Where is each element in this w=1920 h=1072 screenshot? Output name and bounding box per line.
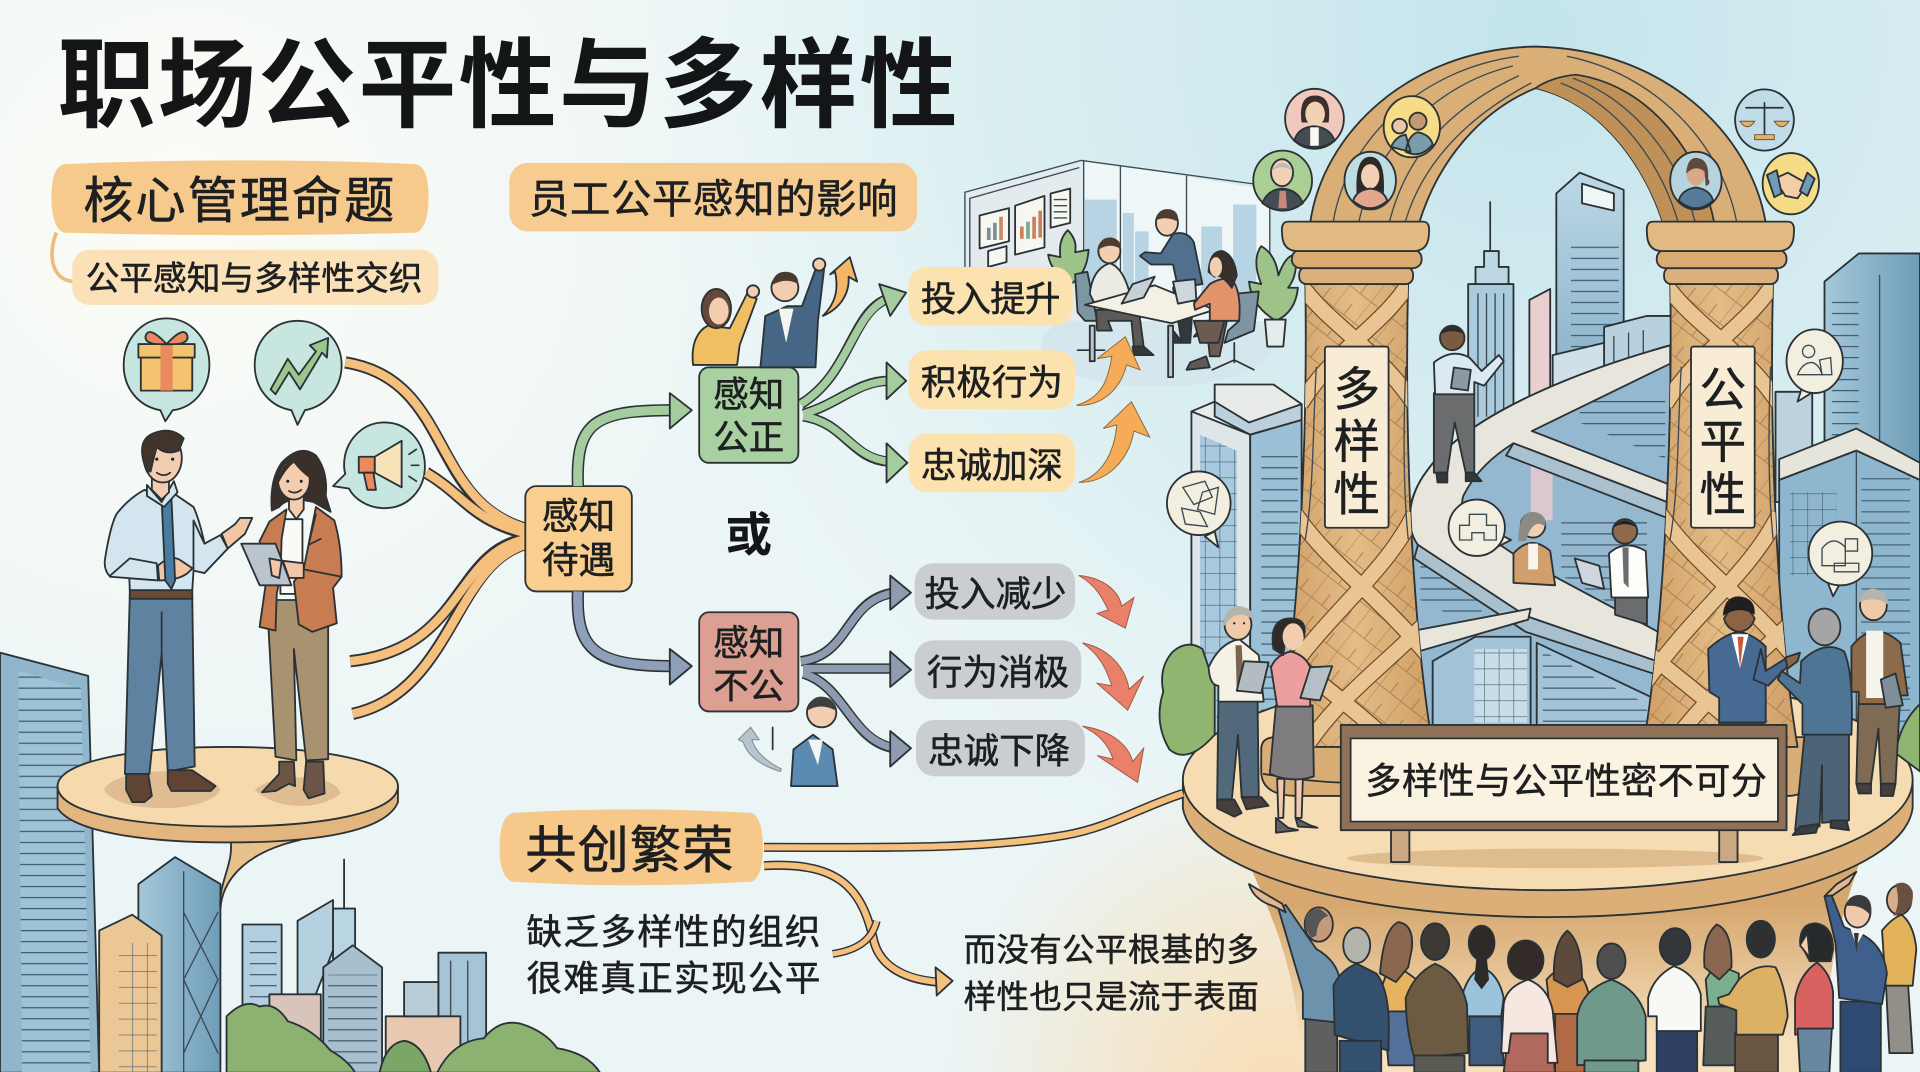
- central sign: 多样性与公平性密不可分: [1365, 760, 1767, 801]
- outcome: engagement up: 投入提升: [921, 279, 1060, 319]
- plaque: 公平性: 平: [1700, 416, 1746, 468]
- trees: left bottom: [227, 1004, 600, 1072]
- ribbons into perceived treatment: [345, 362, 529, 714]
- box: perceived treatment: [525, 486, 632, 591]
- icon bubble: megaphone: [333, 422, 425, 508]
- people: celebrating pair: [693, 257, 857, 367]
- pillar base rings: [1261, 737, 1820, 796]
- note: diversity without equity: [964, 932, 1259, 1015]
- arch: woven span: [1310, 47, 1766, 223]
- plaque: 公平性: 性: [1700, 469, 1746, 521]
- people on platform: right group: [1708, 589, 1908, 835]
- person: man in blue shirt: [105, 431, 252, 802]
- raised-arm man, left: [1249, 884, 1340, 1072]
- outcome: negative behaviour: 行为消极: [927, 652, 1069, 692]
- note: lack of diversity: 很难真正实现公平: [527, 959, 820, 999]
- outcome: positive behaviour: 积极行为: [921, 362, 1063, 402]
- subheading: fairness interwoven with diversity: 公平感知与多样性交织: [86, 260, 422, 298]
- heading: shared prosperity: [500, 809, 763, 885]
- plaque: 多样性: 性: [1333, 469, 1380, 521]
- orange rising arrows: [1076, 337, 1150, 482]
- box: perceived unfair: 不公: [713, 666, 784, 706]
- office plants: [1048, 230, 1298, 347]
- outcome: loyalty down: 忠诚下降: [928, 731, 1070, 771]
- box: perceived unfair: 感知: [713, 623, 784, 663]
- red falling arrows: [1079, 576, 1144, 782]
- connector: core to subtitle: [52, 233, 73, 282]
- skyline: left bottom city: [0, 653, 486, 1072]
- outcome: deeper loyalty: [909, 433, 1075, 492]
- heading: core proposition: 核心管理命题: [83, 173, 394, 229]
- office team around table: [1075, 209, 1259, 377]
- plaque: 公平性: [1691, 347, 1755, 528]
- skyline behind arch: [1191, 173, 1920, 759]
- heading: impact of employee perception: [509, 163, 917, 231]
- box: perceived treatment: 感知: [542, 496, 615, 537]
- people on bridge: woman and laptop man: [1513, 512, 1648, 624]
- sign shadow on platform: [1347, 849, 1763, 868]
- ribbons: prosperity to platform and note: [764, 793, 1183, 996]
- box: perceived treatment: 待遇: [542, 540, 615, 581]
- heading: impact of employee perception: 员工公平感知的影响: [529, 176, 898, 222]
- right platform and pedestal: [1183, 670, 1913, 1072]
- pillar: diversity: [1273, 222, 1439, 759]
- note: diversity without equity: 而没有公平根基的多: [964, 932, 1259, 968]
- pillar: equity: [1638, 222, 1804, 759]
- plaque: 多样性: 多: [1333, 363, 1380, 415]
- arrow: treatment to perceived fair: [578, 393, 692, 486]
- box: perceived fair: [699, 367, 798, 463]
- person: dejected employee: [738, 697, 838, 786]
- branch arrows: fair outcomes: [801, 284, 907, 482]
- outcome: deeper loyalty: 忠诚加深: [921, 446, 1063, 486]
- plaque: 多样性: 样: [1333, 416, 1380, 468]
- left platform: [58, 747, 398, 909]
- note: diversity without equity: 样性也只是流于表面: [964, 979, 1259, 1015]
- note: lack of diversity: 缺乏多样性的组织: [527, 912, 820, 952]
- subheading: fairness interwoven with diversity: [72, 250, 438, 305]
- plaque: 多样性: [1325, 347, 1389, 528]
- outcome: engagement up: [909, 267, 1073, 326]
- icon bubble: growth arrow: [255, 321, 342, 425]
- small speech bubbles in city: [1167, 329, 1872, 596]
- outcome: positive behaviour: [909, 350, 1075, 409]
- people on platform: left pair: [1209, 606, 1332, 833]
- outcome: negative behaviour: [915, 640, 1081, 699]
- title: 职场公平性与多样性: [58, 30, 958, 140]
- heading: shared prosperity: 共创繁荣: [525, 821, 733, 879]
- arrow: treatment to perceived unfair: [578, 591, 692, 684]
- label: or: 或: [726, 509, 772, 561]
- box: perceived fair: 感知: [713, 375, 784, 415]
- outcome: engagement down: 投入减少: [924, 574, 1067, 614]
- office scene: [965, 160, 1273, 387]
- crowd lifting the platform: [1249, 872, 1916, 1072]
- tree left of platform: [1160, 645, 1920, 771]
- person on bridge: presenter: [1434, 326, 1504, 482]
- note: lack of diversity: [527, 912, 820, 999]
- portrait circles on arch: [1253, 89, 1819, 214]
- box: perceived unfair: [699, 612, 798, 711]
- box: perceived fair: 公正: [713, 417, 784, 457]
- person: woman in terracotta blazer: [241, 451, 342, 798]
- outcome: engagement down: [915, 563, 1075, 620]
- spiral bridge and lower buildings: [1407, 345, 1673, 741]
- icon bubble: gift: [124, 318, 209, 421]
- outcome: loyalty down: [916, 720, 1085, 776]
- heading: core proposition: [51, 160, 429, 235]
- branch arrows: unfair outcomes: [801, 576, 911, 767]
- central sign: [1341, 725, 1787, 862]
- plaque: 公平性: 公: [1700, 363, 1746, 415]
